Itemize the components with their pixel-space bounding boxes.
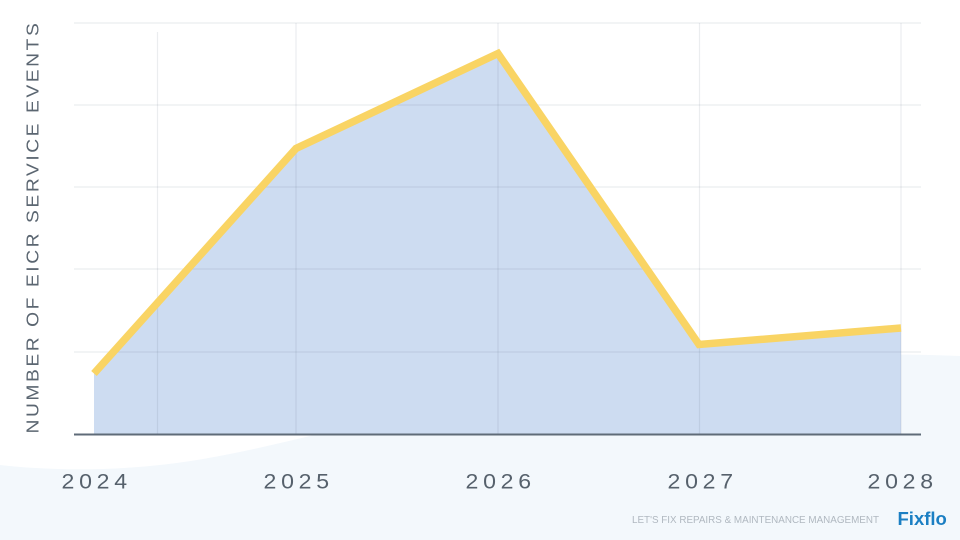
- y axis title: NUMBER OF EICR SERVICE EVENTS: [22, 23, 42, 434]
- x axis labels: 2024: [62, 469, 132, 493]
- x axis labels: 2026: [466, 469, 536, 493]
- data line: [94, 54, 901, 374]
- x axis labels: 2025: [264, 469, 334, 493]
- footer logo: Fixflo: [898, 508, 947, 529]
- x axis labels: 2028: [868, 469, 938, 493]
- area chart fill: [94, 53, 901, 434]
- chart grid: [74, 23, 921, 434]
- x axis line: [74, 434, 921, 436]
- background wave: [0, 355, 960, 540]
- footer tagline: LET'S FIX REPAIRS & MAINTENANCE MANAGEMENT: [632, 515, 880, 526]
- x axis labels: [62, 469, 938, 493]
- x axis labels: 2027: [668, 469, 738, 493]
